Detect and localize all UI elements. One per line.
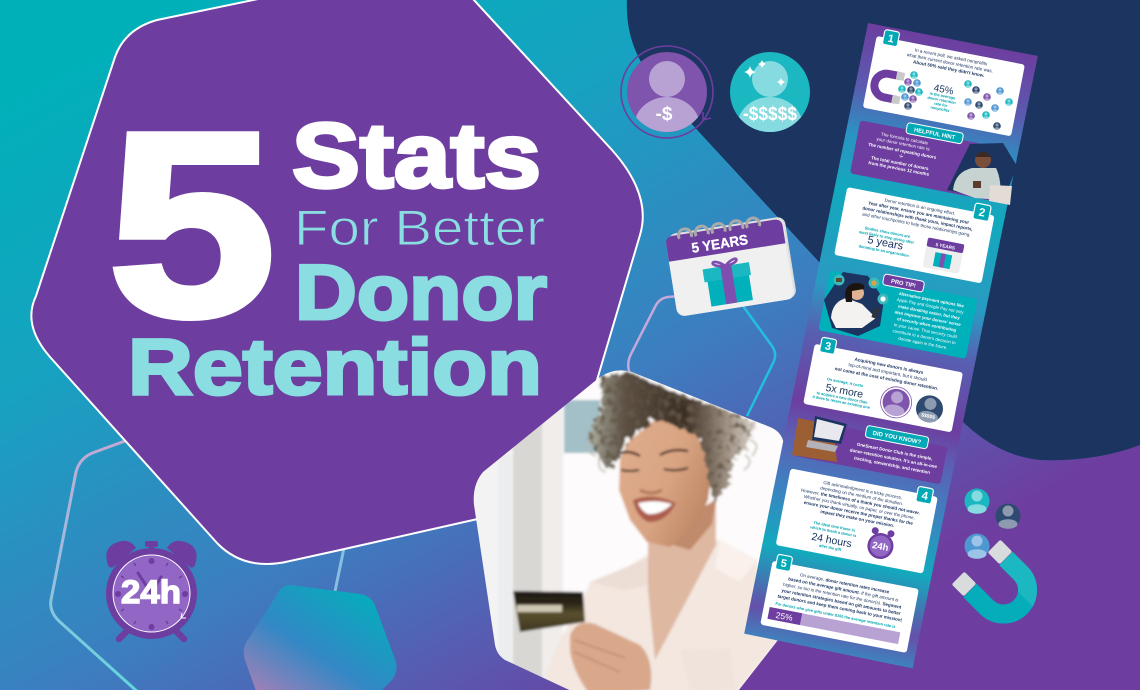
card 5: gift segmentation bbox=[760, 561, 919, 653]
badge 1: 1 bbox=[887, 33, 895, 46]
card 5: gift segmentation: your retention strategies based on gift amounts to better bbox=[781, 588, 901, 616]
card 3: acquisition cost: On average, it costs bbox=[826, 376, 864, 388]
panel: helpful hint: The total number of donors bbox=[871, 155, 930, 171]
panel: helpful hint: from the previous 12 months bbox=[868, 160, 930, 177]
photo: man with phone in helpful hint bbox=[947, 143, 1017, 205]
icon: five year calendar with gift bbox=[664, 213, 797, 317]
panel: did you know: DID YOU KNOW? bbox=[872, 431, 922, 446]
badge 2 bbox=[973, 203, 991, 222]
icon: donor with large gift: -$$$$$ bbox=[743, 104, 797, 125]
card 1: retention poll: 45% bbox=[933, 83, 955, 97]
hand bbox=[570, 623, 651, 690]
card 5: gift segmentation: For donors who give gifts under $100 the average retention rate is bbox=[775, 601, 896, 629]
navy blob bbox=[627, 0, 1140, 460]
panel: pro tip: Alternative payment options like bbox=[898, 291, 965, 309]
photo: woman with phone in pro tip bbox=[824, 272, 888, 336]
panel: helpful hint: The number of repeating donors bbox=[868, 142, 937, 160]
card 5: gift segmentation: target donors and keep them coming back to your mission! bbox=[777, 594, 903, 623]
card 3: acquisition cost: not come at the cost of existing donor retention. bbox=[834, 366, 939, 391]
neck and chest bbox=[648, 500, 716, 660]
card 2: five years: donating to an organization bbox=[858, 243, 910, 258]
panel: pro tip bbox=[818, 263, 979, 359]
card 4: thank you timing: ensure your donor receive the proper thanks for the bbox=[803, 500, 914, 526]
card 4: thank you timing: Whether you thank virtually, on paper, or over the phone, bbox=[804, 494, 915, 520]
card 5: gift segmentation: higher, so too is the retention rate for the donor(s). Segment bbox=[783, 582, 902, 610]
title line: For Better: For Better bbox=[294, 200, 545, 256]
card 1: retention poll bbox=[863, 36, 1025, 136]
card 4: thank you timing: impact they make on your mission. bbox=[820, 509, 895, 528]
panel: helpful hint: your donor retention rate is: bbox=[876, 136, 931, 152]
card 3: acquisition cost bbox=[803, 344, 963, 432]
icon: teal donor bbox=[964, 488, 990, 514]
left hexagon outline bbox=[51, 441, 140, 690]
panel: pro tip: contribute to a donor's decision to bbox=[892, 328, 957, 345]
badge 2: 2 bbox=[978, 207, 986, 220]
card 4: thank you timing: depending on the medium of the donation. bbox=[820, 485, 904, 506]
calendar rings bbox=[678, 217, 760, 239]
card 3: acquisition cost: top-of-mind and important, but it should bbox=[848, 362, 928, 382]
title line: Retention: Retention bbox=[128, 322, 542, 411]
photo: smiling woman holding a credit card bbox=[470, 365, 795, 690]
card 3: acquisition cost: to acquire a new donor than bbox=[816, 390, 869, 405]
card 2: five years: donor relationships with thank yous, impact reports, bbox=[862, 205, 973, 232]
long infographic preview strip bbox=[744, 22, 1038, 670]
card 4: thank you timing: The ideal time frame in bbox=[813, 520, 856, 533]
panel: pro tip: donate again in the future. bbox=[898, 336, 948, 350]
card 4: thank you timing: Gift acknowledgment is a tricky process, bbox=[823, 480, 903, 500]
panel: pro tip: to your cause. That security could bbox=[893, 322, 958, 339]
badge 5: 5 bbox=[780, 557, 788, 570]
title line: Stats: Stats bbox=[292, 105, 541, 207]
card 1: retention poll: In a recent poll, we asked nonprofits bbox=[914, 47, 988, 67]
card 2: five years: 5 YEARS bbox=[935, 242, 955, 251]
title bbox=[108, 77, 547, 411]
panel: pro tip: of security when contributing bbox=[897, 316, 957, 333]
donor dots beside small magnet bbox=[898, 71, 923, 110]
card 5: gift segmentation: On average, donor retention rates increase bbox=[800, 572, 890, 595]
panel: did you know: OneSmart Donor Club is the simple, bbox=[856, 442, 933, 461]
badge 3 bbox=[819, 337, 837, 355]
card 4: thank you timing: 24h bbox=[871, 540, 890, 554]
calendar hexagon outline: cyan bbox=[743, 306, 775, 416]
card 4: thank you timing: 24 hours bbox=[810, 531, 853, 550]
card 2: five years: and other touchpoints to help those relationships going. bbox=[862, 211, 971, 237]
panel: helpful hint: The formula to calculate bbox=[881, 132, 929, 146]
card 1: retention poll: is the average bbox=[929, 91, 957, 101]
icon: alarm clock 24h: 24h bbox=[121, 574, 181, 610]
hair wisps bbox=[588, 440, 757, 472]
card 3: acquisition cost: $$$$$ bbox=[921, 412, 936, 421]
badge 1 bbox=[882, 29, 900, 47]
hair bbox=[587, 371, 757, 503]
card 4: thank you timing: after the gift bbox=[819, 543, 842, 552]
face bbox=[619, 418, 712, 547]
card 4: thank you timing: which to thank a donor is bbox=[809, 524, 857, 538]
card 3: acquisition cost: 5x more bbox=[825, 382, 864, 401]
badge 4 bbox=[916, 486, 934, 504]
connector line bbox=[334, 548, 344, 596]
badge 5 bbox=[775, 554, 793, 572]
card 4: thank you timing: However, the timeliness of a thank you should not waver. bbox=[801, 487, 920, 515]
title line: Donor: Donor bbox=[295, 248, 547, 336]
card 2: five years: Year after year, ensure you are maintaining your bbox=[868, 200, 970, 225]
card 5: gift segmentation: 25% bbox=[775, 610, 794, 623]
card 2: five years: Studies show donors are bbox=[864, 225, 911, 239]
card 2: five years bbox=[834, 187, 995, 283]
icon: blue donor bbox=[964, 534, 990, 559]
icon: alarm clock 24h bbox=[106, 541, 197, 639]
icon: donor with small gift: -$ bbox=[656, 104, 673, 125]
smile bbox=[633, 497, 676, 522]
title numeral 5: 5 bbox=[108, 77, 276, 371]
photo: laptop in did you know bbox=[792, 416, 847, 462]
icon: donor with large gift bbox=[730, 52, 810, 132]
panel: helpful hint bbox=[850, 113, 1010, 202]
panel: pro tip: also improve your donors' sense bbox=[894, 309, 962, 327]
card 1: retention poll: what their current donor retention rate was. bbox=[906, 52, 993, 74]
panel: pro tip: make donating easier, but they bbox=[898, 304, 961, 321]
panel: did you know: donor-retention solution. It's an all-in-one bbox=[849, 447, 938, 469]
card 2: five years: Donor retention is an ongoing effort. bbox=[884, 197, 956, 216]
icon: five year calendar with gift: 5 YEARS bbox=[690, 231, 749, 256]
panel: pro tip: Apple Pay and Google Pay not only bbox=[896, 297, 965, 315]
card 4: thank you timing bbox=[776, 468, 938, 574]
panel: did you know bbox=[794, 413, 949, 484]
scattered donor dots bbox=[964, 80, 1013, 130]
shirt bbox=[540, 540, 778, 690]
card 1: retention poll: nonprofits bbox=[930, 105, 950, 113]
eyebrows and eyes bbox=[620, 450, 688, 456]
gift box bbox=[707, 274, 753, 307]
icon: teal magnet bbox=[952, 540, 1028, 614]
card 2: five years: most likely to stop giving after bbox=[858, 229, 915, 245]
card 3: acquisition cost: Acquiring new donors is always bbox=[854, 357, 924, 375]
icon: navy donor bbox=[996, 504, 1020, 529]
card 3: acquisition cost: it does to retain an existing one bbox=[812, 394, 871, 410]
calendar hexagon outline: lilac bbox=[628, 296, 680, 374]
card 1: retention poll: About 50% said they didn't know. bbox=[913, 59, 985, 78]
badge 3: 3 bbox=[824, 340, 832, 353]
panel: helpful hint: HELPFUL HINT bbox=[913, 127, 956, 141]
main purple hexagon bbox=[31, 0, 643, 564]
card 2: five years: 5 years bbox=[866, 234, 905, 253]
card 1: retention poll: donor retention bbox=[927, 95, 957, 105]
icon: donor with small gift bbox=[620, 45, 714, 139]
badge 4: 4 bbox=[920, 490, 930, 503]
panel: did you know: tracking, stewardship, and retention bbox=[854, 455, 931, 475]
panel: pro tip: PRO TIP! bbox=[890, 279, 916, 290]
card 1: retention poll: rate for bbox=[934, 101, 948, 108]
small gradient hexagon bbox=[244, 585, 396, 690]
card 5: gift segmentation: based on the average gift amount. If the gift amount is bbox=[788, 576, 900, 603]
panel: helpful hint: ÷ bbox=[898, 151, 905, 161]
credit card bbox=[513, 591, 585, 632]
